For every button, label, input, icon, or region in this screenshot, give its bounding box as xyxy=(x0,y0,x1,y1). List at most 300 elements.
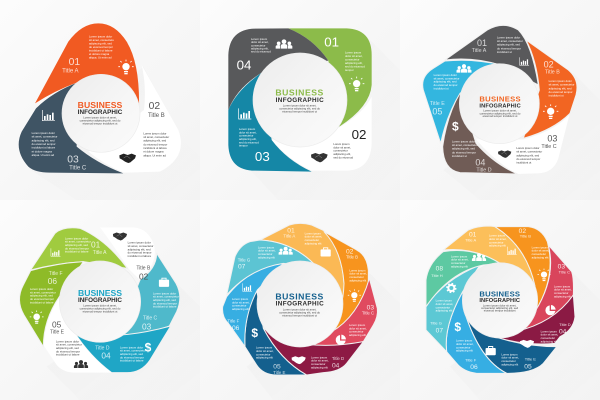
text block 05: incididunt ut labore xyxy=(56,353,80,357)
text block 05: dolor sit amet, xyxy=(501,356,519,360)
text block 03: do eiusmod tempor xyxy=(153,301,177,305)
segment 02 orange xyxy=(523,40,577,138)
text block 05: dolor sit amet, xyxy=(256,349,274,353)
text block C: aliqua. Ut enim ad xyxy=(32,153,55,157)
icon: dollar: $ xyxy=(251,326,258,340)
number and title 06 xyxy=(48,271,63,286)
text block 01: Lorem ipsum xyxy=(489,234,506,238)
text block 05: consectetur xyxy=(501,359,516,363)
number and title 06: Title F xyxy=(227,319,240,324)
segment 08 green xyxy=(426,251,500,307)
text block 04: dolor sit amet, xyxy=(541,333,558,337)
segment 02 white xyxy=(100,227,155,280)
center heading: INFOGRAPHIC xyxy=(276,301,324,308)
icon: handshake xyxy=(311,153,328,162)
text block 03: adipiscing elit, sed xyxy=(153,298,176,302)
text block 03: sit amet, consectetur xyxy=(516,150,542,154)
center heading: Lorem ipsum dolor sit amet, xyxy=(483,109,517,113)
panel: six-step hexagon cycle xyxy=(0,200,200,400)
icon: pie xyxy=(545,305,556,315)
inner circle xyxy=(257,261,343,347)
number and title 06: 06 xyxy=(470,364,478,371)
number and title 02: Title B xyxy=(346,255,358,260)
center heading: BUSINESS xyxy=(275,291,324,301)
text block 07: adipiscing elit xyxy=(258,255,275,259)
text block 05: adipiscing elit xyxy=(256,356,273,360)
number and title 02 xyxy=(136,266,151,281)
panel: five-step pentagon cycle xyxy=(400,0,600,200)
segment 01 orange xyxy=(35,23,139,108)
text block 03: dolor sit amet, xyxy=(239,130,257,134)
text block 01: tempor xyxy=(345,68,354,72)
number 01: 01 xyxy=(324,34,339,49)
text block A: et dolore magna xyxy=(89,52,110,56)
number and title 02: 02 xyxy=(346,249,354,256)
icon: people xyxy=(276,39,292,49)
number and title 01: 01 xyxy=(477,38,487,48)
icon: chart xyxy=(507,247,517,255)
number and title 03: 03 xyxy=(367,305,374,312)
text block A: sit amet, consectetu xyxy=(89,38,114,42)
text block 07: adipiscing elit xyxy=(436,309,453,313)
segment 04 grey xyxy=(228,28,328,110)
number and title A xyxy=(62,57,80,75)
text block 02: Lorem ipsum dolor xyxy=(128,241,151,245)
text block 04: consectetur xyxy=(251,43,266,47)
text block 04: incididunt ut xyxy=(452,154,467,158)
center heading: INFOGRAPHIC xyxy=(78,109,123,116)
segment 06 blue xyxy=(446,292,507,373)
number and title 01 xyxy=(91,240,107,256)
text block 04: adipiscing elit, xyxy=(251,46,269,50)
number and title 05: 05 xyxy=(273,364,281,371)
center heading: INFOGRAPHIC xyxy=(78,297,122,304)
number and title A: 01 xyxy=(69,57,80,68)
text block 04: dolor sit amet, xyxy=(251,40,269,44)
number and title 05: Title E xyxy=(273,370,285,375)
text block 01: adipiscing elit xyxy=(305,241,322,245)
number and title 07: 07 xyxy=(238,264,246,271)
segment 06 green xyxy=(19,262,83,347)
text block A: Lorem ipsum dolor xyxy=(89,35,112,39)
number and title 03: Title C xyxy=(559,269,570,274)
text block 06: Lorem ipsum xyxy=(232,297,249,301)
icon: chart xyxy=(239,108,251,119)
text block 06: incididunt ut labore xyxy=(30,300,54,304)
text block 02: dolor sit amet, xyxy=(333,145,351,149)
text block 02: adipiscing elit, sed xyxy=(549,86,572,90)
text block 04: adipiscing elit xyxy=(311,365,328,369)
text block C: do eiusmod tempor xyxy=(32,142,56,146)
segment 02 orange xyxy=(324,232,368,332)
segment 06 sky xyxy=(223,263,283,347)
center heading: consectetur adipiscing elit, sed do xyxy=(480,111,521,115)
text block 01: incididunt ut xyxy=(497,50,512,54)
text block 05: adipiscing elit, sed xyxy=(434,80,457,84)
text block 05: Lorem ipsum dolor xyxy=(434,73,457,77)
text block 03: Lorem ipsum dolor xyxy=(153,291,176,295)
center heading: eiusmod tempor incididunt ut xyxy=(282,110,317,114)
text block 05: do eiusmod tempor xyxy=(56,349,80,353)
segment 03 red xyxy=(298,278,378,347)
number and title 04: 04 xyxy=(559,328,567,335)
segment 03 red xyxy=(515,245,573,332)
segment 01 light green xyxy=(31,228,127,270)
segment 02 white xyxy=(88,65,181,173)
number and title 02: Title B xyxy=(545,70,560,76)
center heading: eiusmod tempor incididunt xyxy=(484,309,516,313)
text block 03: consectetur xyxy=(554,291,569,295)
text block 01: Lorem ipsum dolor xyxy=(497,35,520,39)
number and title B xyxy=(148,101,165,119)
text block 04: adipiscing elit, sed xyxy=(452,147,475,151)
inner circle xyxy=(62,74,140,152)
text block 01: Lorem ipsum dolor xyxy=(65,236,88,240)
text block 02: adipiscing elit xyxy=(349,278,366,282)
icon: dollar: $ xyxy=(145,341,152,355)
text block 02: do eiusmod tempor xyxy=(128,251,152,255)
text block C: adipiscing elit, sed xyxy=(32,138,55,142)
text block 04: sit amet, consectetur xyxy=(120,349,146,353)
number and title 04: 04 xyxy=(101,351,111,361)
text block 01: Lorem ipsum xyxy=(305,231,322,235)
text block B: do eiusmod tempor xyxy=(143,142,167,146)
number and title 04 xyxy=(332,356,344,369)
text block 07: dolor sit amet, xyxy=(436,302,453,306)
segment 01 grey xyxy=(445,25,538,85)
number and title 01: 01 xyxy=(287,228,295,235)
number and title 05: Title E xyxy=(430,101,445,107)
icon: bulb xyxy=(348,289,361,302)
center heading xyxy=(275,291,324,317)
number and title 02: Title B xyxy=(136,266,151,272)
text block 02: adipiscing elit xyxy=(532,255,549,259)
text block 03: Lorem ipsum dolor xyxy=(516,146,540,150)
text block 01: do eiusmod tempor xyxy=(497,46,521,50)
text block 01: sed do eiusmod xyxy=(345,64,365,68)
number and title 01 xyxy=(283,228,295,239)
number and title 06: Title F xyxy=(465,357,477,362)
text block 02: consectetur xyxy=(333,149,348,153)
text block C: et dolore magna xyxy=(32,149,52,153)
text block 01: adipiscing elit, xyxy=(345,61,363,65)
text block 02: adipiscing elit, xyxy=(333,152,351,156)
text block 06: dolor sit amet, xyxy=(456,342,474,346)
segment 01 yellow xyxy=(260,223,344,332)
number and title 02: 02 xyxy=(544,60,554,70)
segment 02 orange xyxy=(495,227,550,312)
center heading: BUSINESS xyxy=(78,100,123,110)
text block 03: sed do eiusmod xyxy=(239,140,259,144)
number 04: 04 xyxy=(237,58,252,73)
center heading: INFOGRAPHIC xyxy=(276,97,324,104)
number and title 01 xyxy=(465,232,477,242)
icon: bulb xyxy=(30,311,44,324)
number and title 07: 07 xyxy=(436,327,443,334)
number and title 04: Title D xyxy=(95,346,110,352)
number and title 01: 01 xyxy=(91,240,101,250)
text block 01: sit amet, consectetur xyxy=(65,240,91,244)
number and title 03: 03 xyxy=(558,264,565,271)
text block 01: adipiscing elit, sed xyxy=(497,43,520,47)
number and title 06 xyxy=(465,357,478,371)
text block B: aliqua. Ut enim ad xyxy=(143,153,166,157)
text block 02: Lorem ipsum dolor xyxy=(549,79,572,83)
segment 05 cyan xyxy=(423,60,502,143)
icon: bulb xyxy=(349,77,364,91)
icon: dollar: $ xyxy=(452,120,459,134)
text block 04: consectetur xyxy=(311,362,326,366)
number and title 02: 02 xyxy=(519,228,526,235)
text block 05: sit amet, consectetur xyxy=(56,343,82,347)
icon: chart xyxy=(520,57,529,65)
number and title 01: 01 xyxy=(469,232,477,239)
center heading: BUSINESS xyxy=(275,87,324,97)
number and title 05 xyxy=(524,357,536,370)
segment 01 green xyxy=(288,28,372,127)
number and title 01: Title A xyxy=(472,48,487,54)
text block 06: consectetur xyxy=(456,345,471,349)
text block 02: do eiusmod tempor xyxy=(549,90,573,94)
text block 04: sed do eiusmod xyxy=(251,50,271,54)
icon: dollar: $ xyxy=(454,320,461,334)
segment 07 light teal xyxy=(227,240,317,295)
number and title C: Title C xyxy=(69,165,87,171)
text block 04: Lorem ipsum dolor xyxy=(452,139,475,143)
icon: gear xyxy=(447,284,456,292)
text block 03: adipiscing elit xyxy=(349,333,366,337)
icon: people xyxy=(74,360,88,368)
icon: handshake xyxy=(498,150,511,158)
center heading: Lorem ipsum dolor sit amet, xyxy=(483,303,517,307)
center heading: Lorem ipsum dolor sit amet, xyxy=(283,307,317,311)
text block 02: incididunt ut xyxy=(549,94,564,98)
text block 03: Lorem ipsum xyxy=(554,284,571,288)
segment 04 teal xyxy=(74,326,171,373)
text block 03: dolor sit amet, xyxy=(554,288,572,292)
number and title 08: 08 xyxy=(436,266,443,273)
icon: chart xyxy=(243,283,252,291)
number and title 05 xyxy=(430,101,445,117)
text block 01: consectetur xyxy=(305,238,319,242)
text block 04: Lorem ipsum xyxy=(541,329,558,333)
number and title 05: 05 xyxy=(52,319,62,329)
inner circle xyxy=(459,64,539,144)
number and title 06: Title F xyxy=(49,271,63,277)
segment 05 navy xyxy=(465,313,557,373)
center heading: eiusmod tempor incididunt ut xyxy=(83,121,118,125)
text block 03: adipiscing elit xyxy=(554,294,571,298)
number and title C: 03 xyxy=(67,155,79,166)
number and title 04: 04 xyxy=(332,362,340,369)
number and title 06 xyxy=(227,319,240,332)
center heading: eiusmod tempor incididunt ut xyxy=(83,309,118,313)
text block 01: dolor sit amet, xyxy=(305,235,322,239)
number 03: 03 xyxy=(255,149,270,164)
center heading xyxy=(479,94,521,118)
number and title 07 xyxy=(430,321,443,334)
text block 06: adipiscing elit, sed xyxy=(30,294,53,298)
text block 05: incididunt ut xyxy=(434,86,449,90)
number and title 05 xyxy=(273,364,285,375)
center heading xyxy=(78,288,122,313)
icon: handshake xyxy=(119,154,136,163)
number and title 02 xyxy=(519,228,531,239)
number and title C xyxy=(67,155,87,171)
text block 07: Lorem ipsum xyxy=(436,299,453,303)
panel: eight-step octagon cycle xyxy=(400,200,600,400)
text block 05: do eiusmod tempor xyxy=(434,83,458,87)
text block C: Lorem ipsum dolor xyxy=(32,131,55,135)
text block 02: adipiscing elit, sed xyxy=(128,247,151,251)
icon: chart xyxy=(51,248,60,256)
text block 01: sit amet, consectetur xyxy=(497,39,523,43)
text block 06: dolor sit amet, xyxy=(232,300,250,304)
text block 02: consectetur xyxy=(532,252,546,256)
center heading: BUSINESS xyxy=(479,94,521,103)
center heading: consectetur adipiscing elit, sed xyxy=(481,306,519,310)
icon: bulb xyxy=(537,269,551,281)
center heading xyxy=(275,87,324,114)
text block 08: Lorem ipsum xyxy=(451,254,468,258)
number and title 04 xyxy=(95,346,111,361)
text block 04: adipiscing elit xyxy=(541,339,558,343)
number and title 04 xyxy=(475,158,492,174)
text block 03: adipiscing elit, xyxy=(239,137,257,141)
center heading: consectetur adipiscing elit, sed do xyxy=(80,118,121,122)
number and title 04: Title D xyxy=(559,322,571,327)
text block 03: tempor xyxy=(239,144,248,148)
text block A: do eiusmod tempor xyxy=(89,45,113,49)
number and title 01: Title A xyxy=(283,234,295,239)
text block 01: dolor sit amet, xyxy=(345,54,363,58)
text block 02: incididunt ut labore xyxy=(128,254,152,258)
center heading: consectetur adipiscing elit, sed do xyxy=(80,306,121,310)
text block C: incididunt ut labore xyxy=(32,146,56,150)
center heading: BUSINESS xyxy=(479,289,520,298)
text block 01: adipiscing elit xyxy=(489,244,506,248)
text block 02: dolor sit amet, xyxy=(349,272,367,276)
segment 03 light teal xyxy=(117,253,180,338)
panel: four-step square cycle xyxy=(200,0,400,200)
text block 03: dolor sit amet, xyxy=(349,326,367,330)
segment 04 brown xyxy=(443,93,517,174)
number and title 01: Title A xyxy=(465,237,476,242)
number and title 03 xyxy=(142,316,158,331)
number and title 02 xyxy=(346,249,358,260)
icon: pie xyxy=(336,335,346,345)
center heading: consectetur adipiscing elit, sed do xyxy=(279,310,321,314)
inner circle xyxy=(253,53,347,147)
segment 02 white xyxy=(272,97,372,171)
text block 02: consectetur xyxy=(349,275,364,279)
text block 04: do eiusmod tempor xyxy=(452,150,476,154)
text block 05: consectetur xyxy=(256,352,271,356)
number and title 04: 04 xyxy=(475,158,485,168)
number and title 05 xyxy=(50,319,65,336)
inner circle xyxy=(59,261,141,342)
center heading xyxy=(479,289,520,313)
text block B: Lorem ipsum dolor xyxy=(143,131,167,135)
text block B: et dolore magna xyxy=(143,150,164,154)
number and title 01: Title A xyxy=(93,250,107,256)
text block 03: incididunt ut xyxy=(516,161,531,165)
text block 07: consectetur xyxy=(436,305,450,309)
icon: handshake xyxy=(292,356,306,364)
segment 05 white xyxy=(44,297,112,373)
number and title 03 xyxy=(558,264,570,274)
text block 01: adipiscing elit, sed xyxy=(65,243,88,247)
text block 04: sit amet, consectetur xyxy=(452,143,478,147)
center heading: eiusmod tempor incididunt ut xyxy=(483,114,518,118)
inner circle xyxy=(462,263,538,338)
icon: briefcase xyxy=(486,346,496,355)
center heading: INFOGRAPHIC xyxy=(479,103,521,109)
number and title B: Title B xyxy=(148,113,165,119)
text block 02: Lorem ipsum xyxy=(532,245,549,249)
text block 02: Lorem ipsum xyxy=(333,142,350,146)
number and title 02: 02 xyxy=(139,271,149,281)
text block 04: dolor sit amet, xyxy=(311,359,329,363)
text block B: sit amet, consectetur xyxy=(143,135,169,139)
icon: people xyxy=(472,253,486,261)
icon: handshake xyxy=(520,340,534,348)
number and title 08 xyxy=(431,266,443,278)
text block 01: dolor sit amet, xyxy=(489,237,507,241)
text block 06: Lorem ipsum xyxy=(456,339,473,343)
text block 07: dolor sit amet, xyxy=(258,249,276,253)
text block 06: consectetur xyxy=(232,304,247,308)
text block 01: consectetur xyxy=(489,240,504,244)
text block 05: adipiscing elit, sed xyxy=(56,346,79,350)
text block 07: consectetur xyxy=(258,252,273,256)
text block B: incididunt ut labore xyxy=(143,146,167,150)
text block 03: consectetur xyxy=(349,330,364,334)
number and title 04: Title D xyxy=(476,168,492,174)
text block A: incididunt ut labore xyxy=(89,49,113,53)
text block B: adipiscing elit, sed xyxy=(143,139,167,143)
number and title 04: Title D xyxy=(332,356,344,361)
number and title A: Title A xyxy=(62,69,79,75)
number and title 07: Title G xyxy=(238,257,251,262)
text block 02: sed do eiusmod xyxy=(333,155,354,159)
number and title B: 02 xyxy=(149,101,160,112)
text block 01: consectetur xyxy=(345,57,360,61)
text block 05: Lorem ipsum xyxy=(501,352,518,356)
number and title 03: Title C xyxy=(362,311,374,316)
number and title 02: Title B xyxy=(520,234,531,239)
icon: chart xyxy=(42,110,55,121)
center heading: Lorem ipsum dolor sit amet, xyxy=(283,104,317,108)
segment 03 teal xyxy=(228,73,312,172)
number and title 05: 05 xyxy=(432,107,442,117)
segment 01 yellow xyxy=(443,226,535,286)
text block A: aliqua. Ut enim ad xyxy=(89,56,112,60)
center heading: Lorem ipsum dolor sit amet, xyxy=(83,115,117,119)
number and title 07: Title G xyxy=(430,321,442,326)
text block 01: do eiusmod tempor xyxy=(65,246,89,250)
text block 02: Lorem ipsum xyxy=(349,268,366,272)
text block 05: sit amet, consectetur xyxy=(434,76,460,80)
segment 04 crimson xyxy=(485,295,575,344)
text block 01: Lorem ipsum xyxy=(345,50,362,54)
number and title 05: Title E xyxy=(525,357,536,362)
text block 03: Lorem ipsum xyxy=(349,323,366,327)
text block 07: Lorem ipsum xyxy=(258,245,275,249)
segment 03 slate xyxy=(19,83,123,173)
text block 03: do eiusmod tempor xyxy=(516,157,540,161)
text block 04: Lorem ipsum dolor xyxy=(120,345,143,349)
